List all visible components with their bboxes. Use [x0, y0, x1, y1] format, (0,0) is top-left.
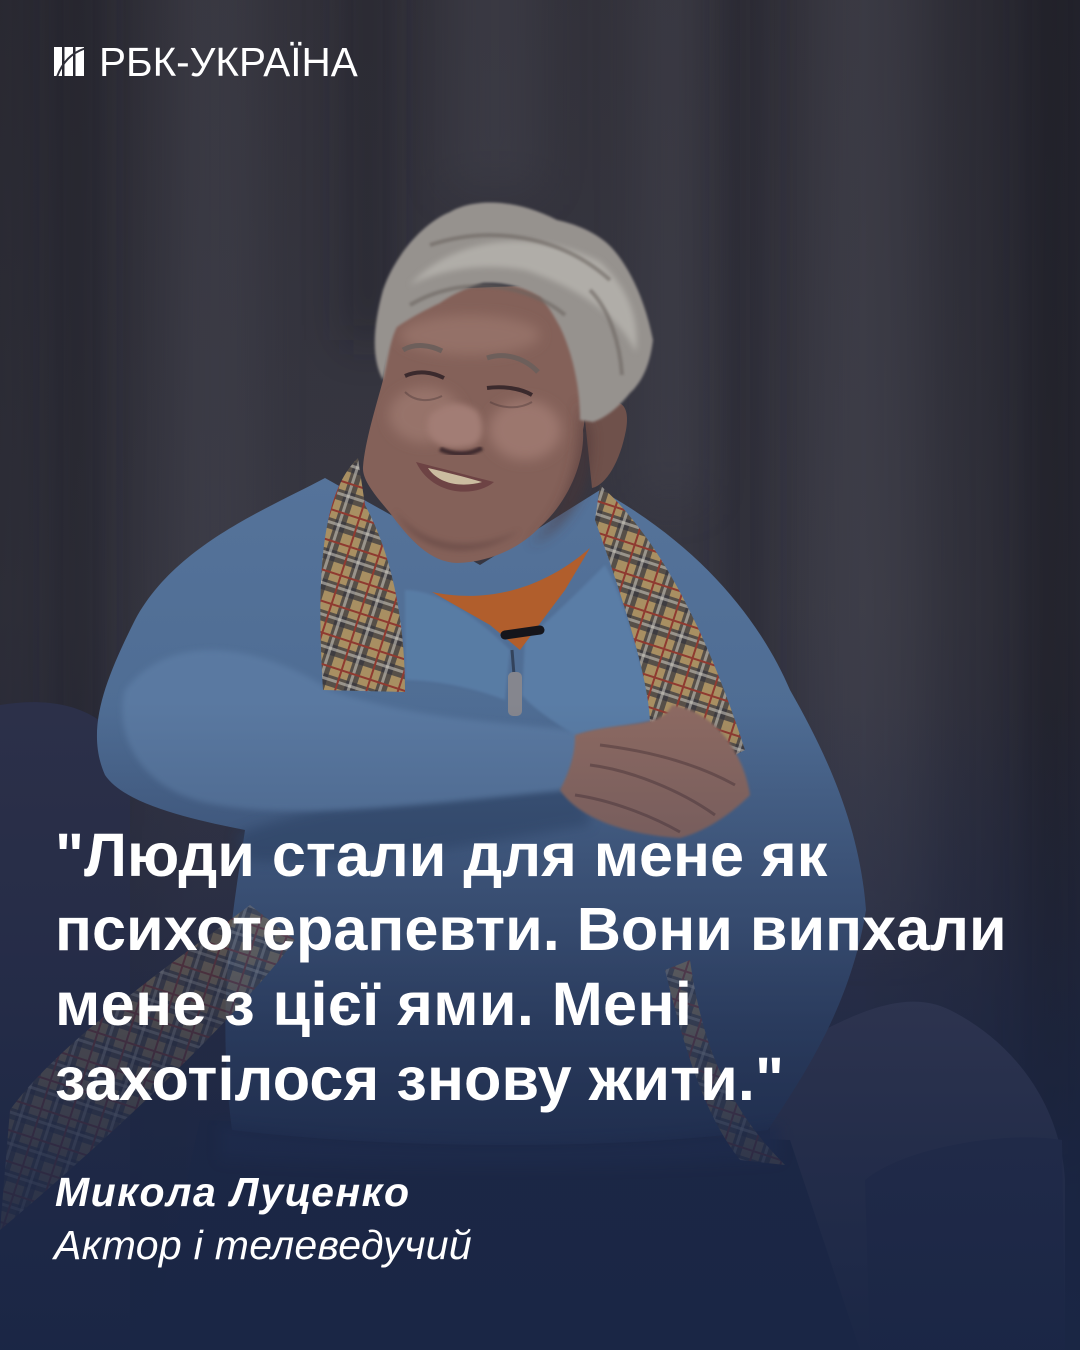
logo mark	[54, 47, 84, 76]
mouth	[416, 462, 494, 492]
logo wordmark: РБК-УКРАЇНА	[99, 39, 358, 85]
gray hair	[375, 202, 653, 422]
nose	[428, 404, 482, 448]
scarf	[0, 458, 785, 1230]
sofa	[0, 702, 1065, 1350]
logo: РБК-Україна	[54, 39, 358, 85]
speaker name: Микола Луценко	[55, 1169, 411, 1215]
quote heading: "Люди стали для мене як	[55, 821, 827, 889]
hands	[560, 705, 750, 838]
quote heading: психотерапевти. Вони випхали	[55, 895, 1007, 963]
eyes and brows	[403, 346, 538, 407]
speaker role: Актор і телеведучий	[54, 1222, 472, 1268]
sweater torso and arms	[97, 478, 866, 1168]
sweater collar	[405, 590, 510, 700]
quote heading	[55, 821, 1007, 1113]
quote heading: мене з цієї ями. Мені	[55, 970, 692, 1038]
undershirt collar	[432, 548, 590, 650]
head and face	[363, 285, 627, 563]
zipper pull	[508, 672, 522, 716]
microphone	[505, 630, 540, 635]
ear	[585, 402, 627, 488]
trousers	[150, 1120, 860, 1350]
face	[363, 285, 585, 563]
quote heading: захотілося знову жити."	[55, 1045, 784, 1113]
